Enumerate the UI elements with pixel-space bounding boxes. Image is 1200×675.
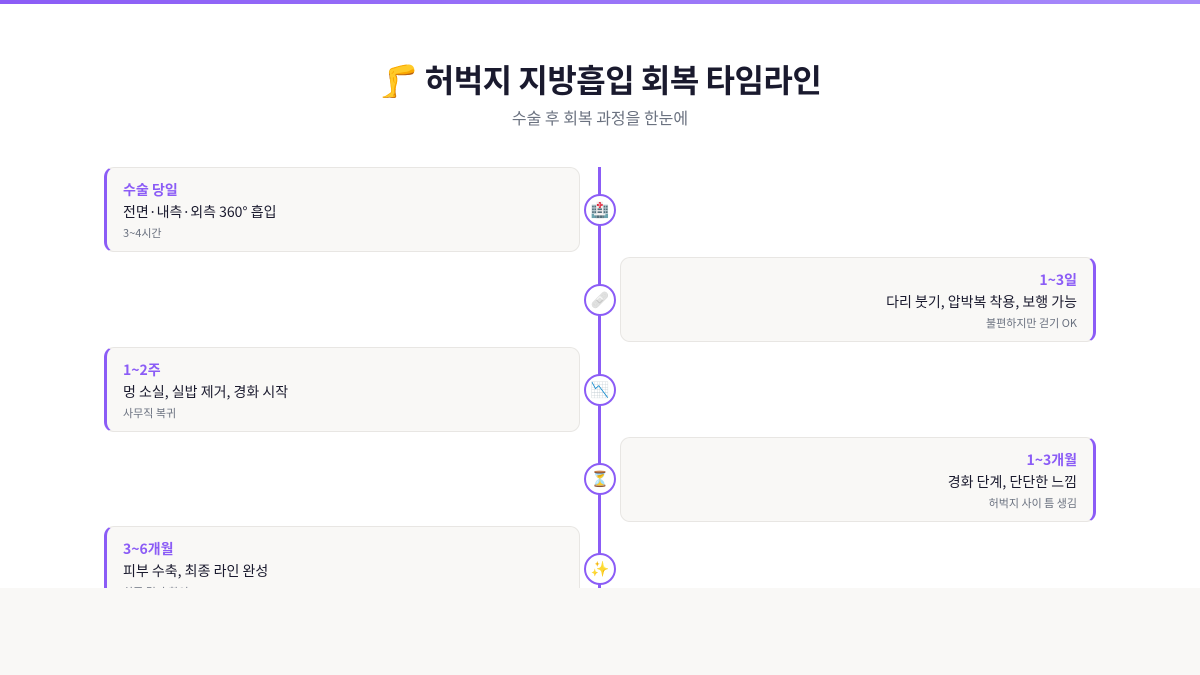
subtitle: 수술 후 회복 과정을 한눈에 [512, 105, 688, 129]
card: surgery day [104, 167, 580, 252]
icon: bandage: 🩹 [591, 289, 609, 310]
icon: sparkles [584, 553, 616, 585]
card: 1-3 days: 불편하지만 걷기 OK [986, 315, 1077, 331]
card: 1-3 months: 경화 단계, 단단한 느낌 [948, 472, 1077, 492]
card: 3-6 months [104, 526, 580, 611]
card: 1-3 days: 1~3일 [1039, 270, 1077, 290]
icon: hourglass: ⏳ [591, 468, 609, 489]
card: 1-3 days [620, 257, 1096, 342]
card: 1-2 weeks: 멍 소실, 실밥 제거, 경화 시작 [123, 382, 288, 402]
icon: sparkles: ✨ [591, 558, 609, 579]
icon: hospital: 🏥 [591, 199, 609, 220]
title: 🦵 허벅지 지방흡입 회복 타임라인 [379, 56, 821, 102]
card: surgery day: 전면·내측·외측 360° 흡입 [123, 202, 277, 222]
card: 1-3 months: 1~3개월 [1026, 450, 1077, 470]
icon: chart down: 📉 [591, 379, 609, 400]
card: 1-3 days: 다리 붓기, 압박복 착용, 보행 가능 [886, 292, 1077, 312]
icon: hospital [584, 194, 616, 226]
card: 1-3 months [620, 437, 1096, 522]
card: surgery day: 3~4시간 [123, 225, 162, 241]
card: 1-2 weeks [104, 347, 580, 432]
icon: hourglass [584, 463, 616, 495]
timeline line [598, 167, 601, 597]
card: 1-2 weeks: 사무직 복귀 [123, 405, 176, 421]
card: 1-2 weeks: 1~2주 [123, 360, 161, 380]
card: surgery day: 수술 당일 [123, 180, 178, 200]
card: 1-3 months: 허벅지 사이 틈 생김 [989, 495, 1077, 511]
card: 3-6 months: 피부 수축, 최종 라인 완성 [123, 561, 268, 581]
icon: chart down [584, 374, 616, 406]
icon: bandage [584, 284, 616, 316]
card: 3-6 months: 3~6개월 [123, 539, 174, 559]
